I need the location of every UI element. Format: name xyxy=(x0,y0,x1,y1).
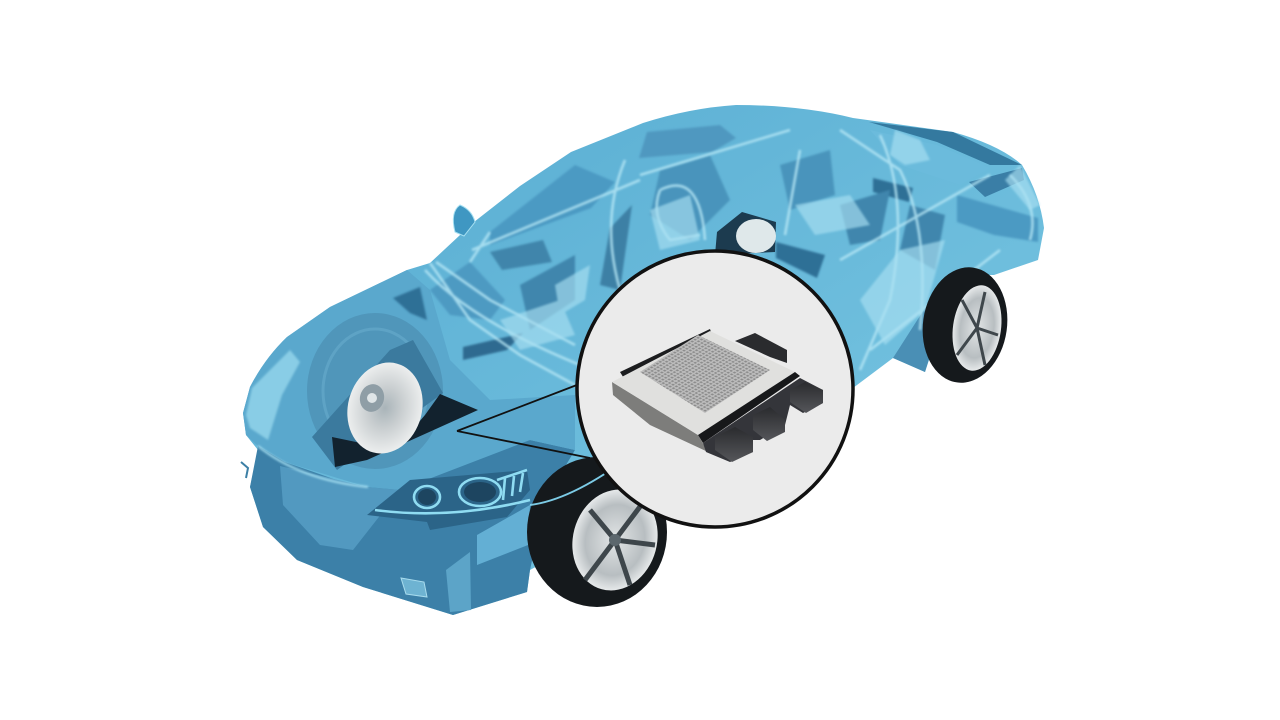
bottom terminals xyxy=(698,372,823,462)
bumper inner panel xyxy=(280,466,400,550)
callout leader lines xyxy=(457,383,590,458)
rear wheel xyxy=(915,262,1015,388)
rear clips xyxy=(620,329,712,380)
module side xyxy=(612,382,708,452)
hood highlight at nose xyxy=(246,350,368,487)
base plate xyxy=(612,331,795,435)
rear deck xyxy=(969,168,1024,197)
pale structure lines xyxy=(425,130,1032,385)
lower front bumper xyxy=(250,440,575,615)
pale interior shapes xyxy=(500,130,1040,350)
car body xyxy=(241,105,1044,615)
mirror xyxy=(453,205,475,236)
rear window xyxy=(870,130,990,185)
rear door panel xyxy=(893,270,957,372)
ghost rear wheel xyxy=(715,212,776,255)
spoiler xyxy=(869,122,1022,165)
icon: power module xyxy=(612,329,823,462)
side windows and dark interior panels xyxy=(393,125,1038,360)
ghost front wheel xyxy=(307,313,478,470)
headlight xyxy=(367,470,530,530)
top terminals xyxy=(735,333,787,363)
small emblem xyxy=(241,462,248,478)
fin array xyxy=(640,335,770,413)
callout circle xyxy=(577,251,853,527)
front wheel xyxy=(527,457,669,607)
bumper vent xyxy=(446,552,471,612)
fender panel xyxy=(477,505,530,565)
hood xyxy=(243,270,575,490)
fog lamp xyxy=(401,578,427,597)
